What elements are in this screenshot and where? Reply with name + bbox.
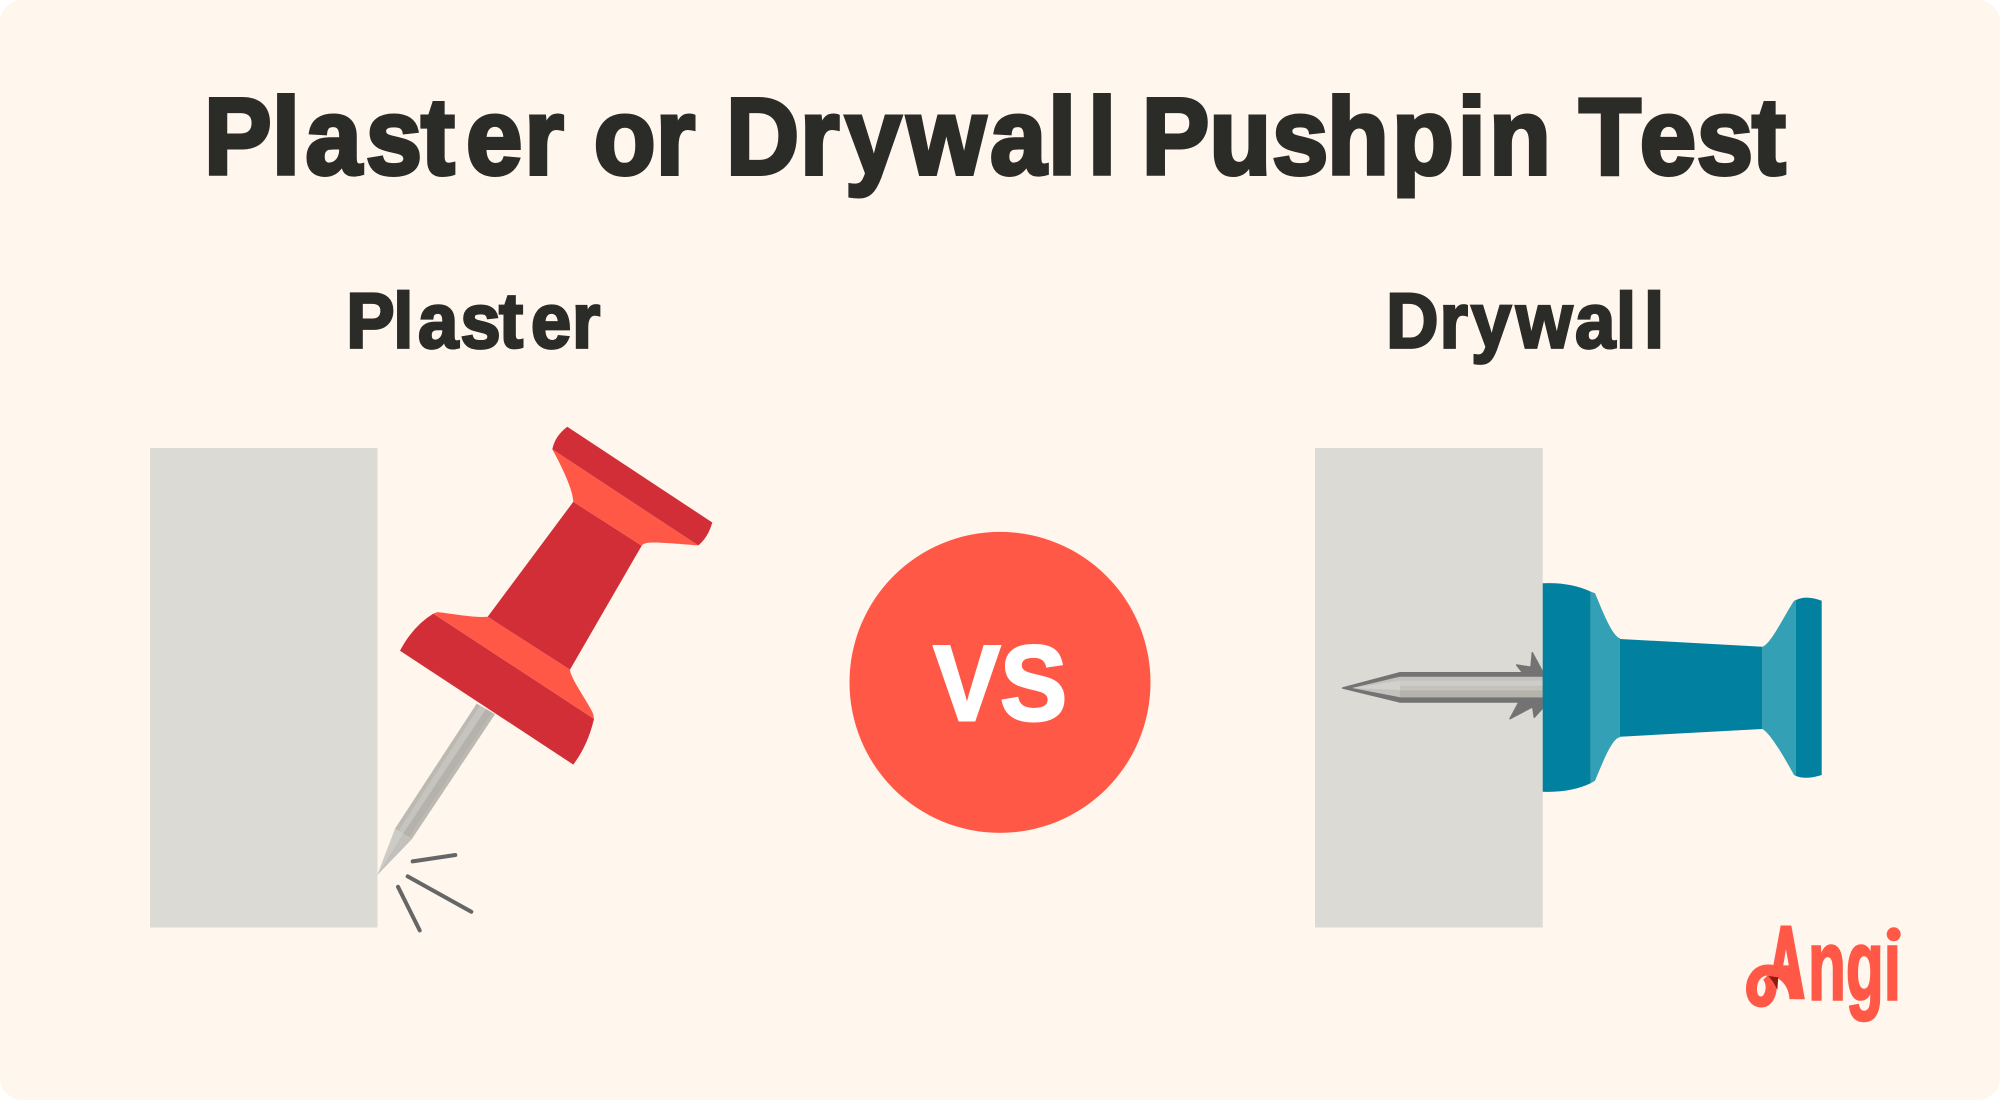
logo wordmark A: A: [1768, 907, 1804, 1017]
pin lower flare: [433, 612, 594, 719]
blue body: [1620, 639, 1762, 737]
logo swoosh: [1751, 970, 1795, 1002]
plaster wall: [150, 448, 378, 928]
pin needle: [377, 704, 495, 875]
blue flare left and right: [1591, 592, 1796, 783]
vs text: VS: [934, 623, 1067, 743]
pin upper flare: [552, 449, 698, 546]
icon: pushpin needle embedded in drywall: [1343, 653, 1543, 719]
icon: impact spark lines: [398, 855, 471, 930]
blue head: [1543, 583, 1822, 792]
pin lower cap: [400, 614, 594, 765]
drywall wall: [1315, 448, 1543, 928]
Angi logo: [1746, 926, 1901, 1022]
pin upper cap: [552, 427, 712, 545]
heading: drywall: Drywall: [1386, 277, 1664, 364]
heading: plaster: Plaster: [346, 277, 600, 364]
logo i dot: [1887, 927, 1901, 941]
icon: red pushpin bouncing off plaster: [377, 427, 712, 875]
icon: blue pushpin: [1543, 583, 1822, 792]
title: Plaster or Drywall Pushpin Test: [204, 77, 1786, 198]
vs circle: [850, 532, 1150, 833]
vs badge: [850, 532, 1150, 833]
logo overlap shadow: [1768, 976, 1778, 990]
pin body: [488, 502, 642, 670]
logo wordmark ngi: ngi: [1808, 909, 1901, 1021]
needle cracks and outline: [1343, 653, 1543, 719]
needle shaft: [1352, 677, 1543, 697]
